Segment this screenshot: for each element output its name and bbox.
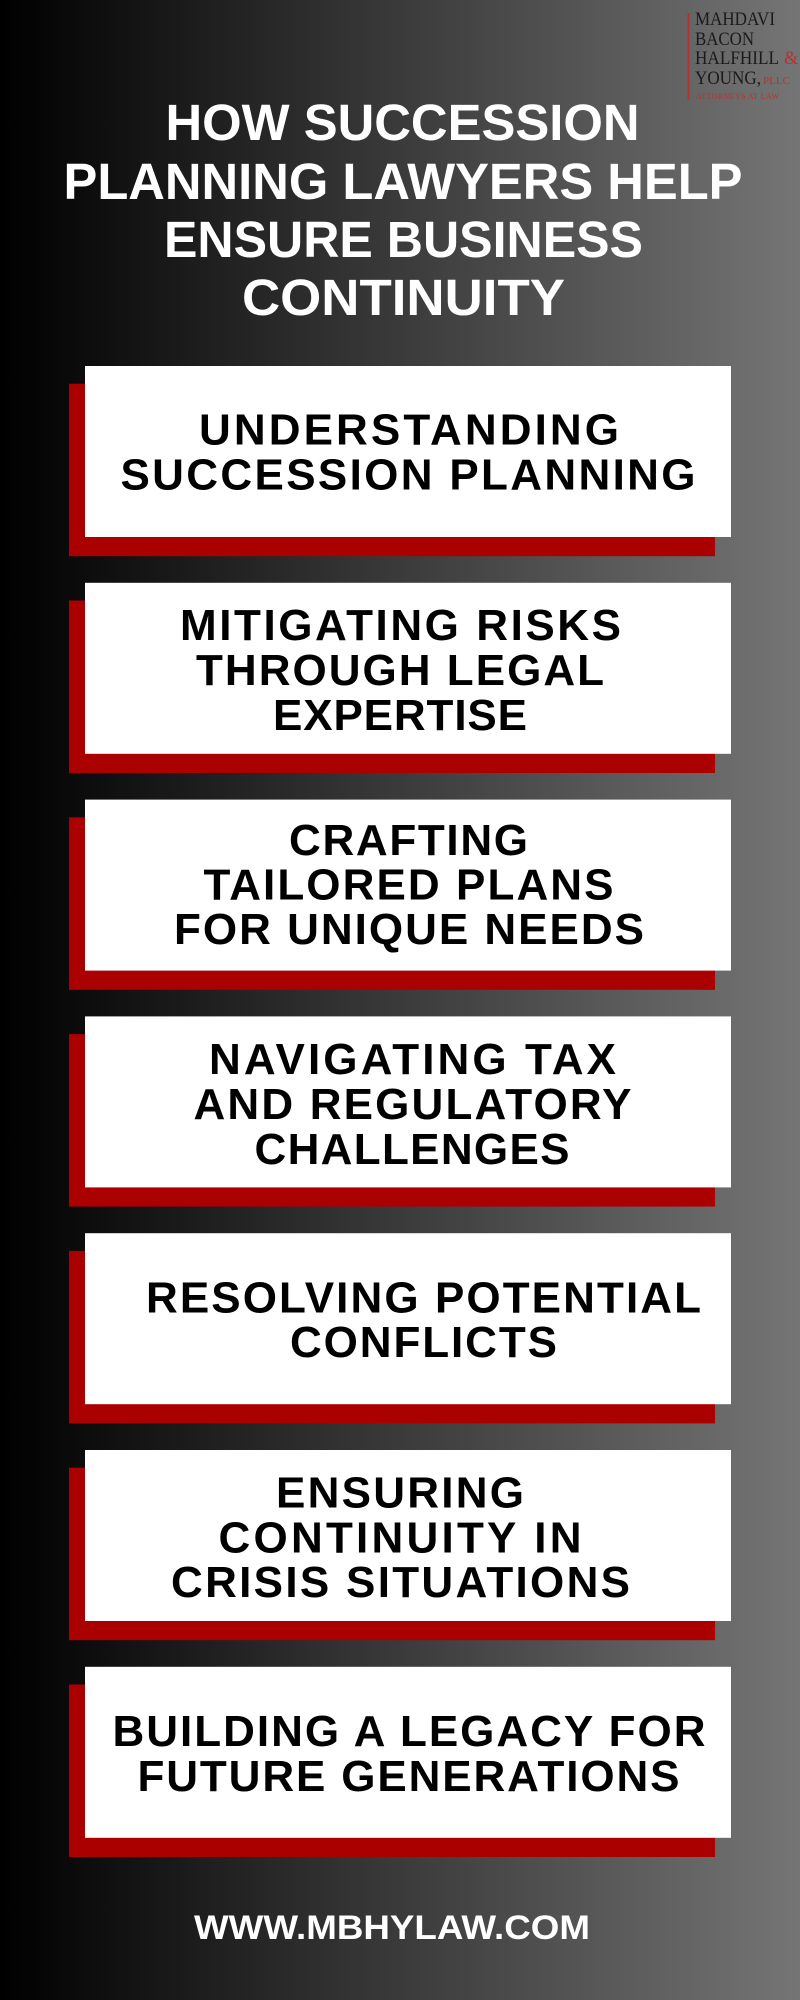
panel: understanding succession planning: UNDERSTANDING — [199, 406, 619, 454]
panel: mitigating risks through legal expertise — [69, 583, 731, 773]
panel: resolving potential conflicts: CONFLICTS — [290, 1318, 557, 1367]
panel: navigating tax and regulatory challenges: AND REGULATORY — [194, 1080, 632, 1129]
title: CONTINUITY — [242, 269, 565, 326]
panel: crafting tailored plans for unique needs: TAILORED PLANS — [204, 860, 614, 910]
logo: Mahdavi Bacon Halfhill & Young: & — [784, 49, 799, 69]
logo: Mahdavi Bacon Halfhill & Young: MAHDAVI — [695, 10, 775, 30]
panel: ensuring continuity in crisis situations — [69, 1450, 731, 1640]
panel: navigating tax and regulatory challenges: NAVIGATING TAX — [209, 1035, 616, 1084]
logo: Mahdavi Bacon Halfhill & Young — [688, 10, 799, 101]
footer website: WWW.MBHYLAW.COM — [194, 1909, 590, 1947]
panel: building a legacy for future generations — [69, 1667, 731, 1857]
panel: navigating tax and regulatory challenges — [69, 1016, 731, 1207]
panel: ensuring continuity in crisis situations: CRISIS SITUATIONS — [171, 1558, 630, 1607]
panel: mitigating risks through legal expertise: EXPERTISE — [273, 691, 527, 740]
logo: Mahdavi Bacon Halfhill & Young: PLLC — [763, 75, 790, 87]
logo: Mahdavi Bacon Halfhill & Young: YOUNG, — [695, 69, 761, 89]
panel: building a legacy for future generations: BUILDING A LEGACY FOR — [112, 1707, 706, 1756]
panel: crafting tailored plans for unique needs: FOR UNIQUE NEEDS — [174, 905, 644, 954]
title: ENSURE BUSINESS — [164, 211, 643, 268]
panel: mitigating risks through legal expertise: THROUGH LEGAL — [196, 646, 604, 695]
panel: understanding succession planning — [69, 366, 731, 556]
panel: mitigating risks through legal expertise: MITIGATING RISKS — [180, 601, 621, 650]
logo: Mahdavi Bacon Halfhill & Young: HALFHILL — [695, 49, 779, 69]
panel: understanding succession planning: SUCCESSION PLANNING — [120, 450, 696, 500]
panel: crafting tailored plans for unique needs — [69, 800, 731, 990]
logo: Mahdavi Bacon Halfhill & Young: BACON — [695, 30, 754, 50]
panel: building a legacy for future generations: FUTURE GENERATIONS — [138, 1752, 680, 1801]
title: PLANNING LAWYERS HELP — [64, 153, 742, 210]
panel: navigating tax and regulatory challenges: CHALLENGES — [254, 1125, 570, 1174]
logo: Mahdavi Bacon Halfhill & Young: ATTORNEYS AT LAW — [696, 92, 779, 101]
title: HOW SUCCESSION — [166, 94, 640, 151]
panel: ensuring continuity in crisis situations: CONTINUITY IN — [218, 1514, 582, 1562]
panel: crafting tailored plans for unique needs: CRAFTING — [289, 816, 528, 865]
panel: resolving potential conflicts: RESOLVING POTENTIAL — [146, 1274, 701, 1322]
panel: ensuring continuity in crisis situations: ENSURING — [276, 1468, 524, 1518]
title — [64, 94, 742, 326]
panel: resolving potential conflicts — [69, 1233, 731, 1423]
